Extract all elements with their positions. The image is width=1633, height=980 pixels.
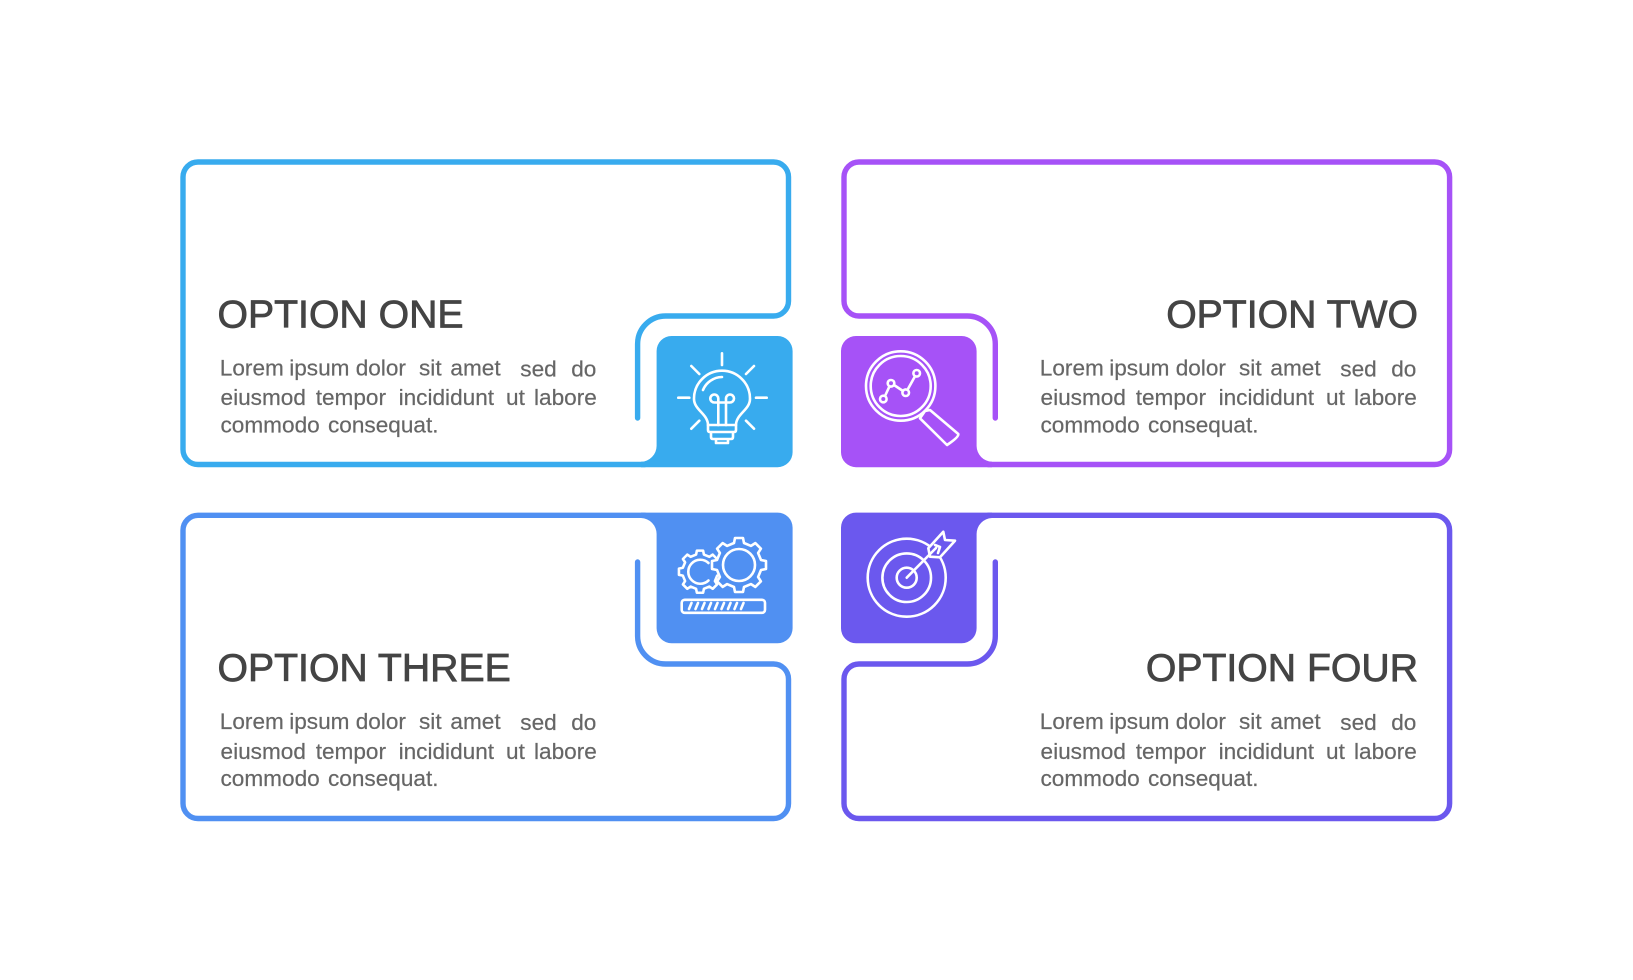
outline: option four <box>844 515 1450 818</box>
text block: option three: ut <box>506 739 526 764</box>
text block: option two: commodo <box>1040 412 1140 438</box>
panel: option four <box>841 513 1450 818</box>
text block: option one: dolor <box>356 356 406 380</box>
icon: light bulb <box>678 353 767 443</box>
text block: option three <box>220 709 597 791</box>
text block: option two: incididunt <box>1219 385 1315 410</box>
outline: option three <box>183 515 788 818</box>
text block: option one: sit <box>419 356 442 380</box>
text block: option two <box>1040 356 1417 438</box>
heading: option three: OPTION THREE <box>218 647 511 690</box>
text block: option four: eiusmod <box>1040 739 1126 764</box>
text block: option three: dolor <box>356 709 406 734</box>
text block: option one: Lorem <box>220 356 284 380</box>
text block: option three: ipsum <box>289 709 349 734</box>
text block: option four: commodo <box>1040 766 1140 791</box>
icon tile: option four <box>841 513 992 643</box>
text block: option one: incididunt <box>399 385 495 410</box>
text block: option four: consequat. <box>1148 766 1259 791</box>
text block: option two: Lorem <box>1040 356 1104 380</box>
text block: option three: labore <box>534 739 597 764</box>
text block: option three: eiusmod <box>220 739 306 764</box>
icon tile: option one <box>641 336 793 467</box>
text block: option two: ut <box>1326 385 1346 410</box>
text block: option two: sit <box>1239 356 1262 380</box>
text block: option two: tempor <box>1136 385 1206 410</box>
icon tile: option two <box>841 336 992 467</box>
text block: option one: amet <box>450 356 501 380</box>
outline: option one <box>183 162 788 464</box>
text block: option one: labore <box>534 385 597 410</box>
text block: option one <box>220 356 597 438</box>
text block: option one: commodo <box>220 412 320 438</box>
text block: option four: sit <box>1239 709 1262 734</box>
text block: option four: amet <box>1270 709 1321 734</box>
heading: option four: OPTION FOUR <box>1146 647 1418 690</box>
text block: option three: sed <box>520 710 557 735</box>
panel: option three <box>183 513 793 818</box>
text block: option four: sed <box>1340 710 1377 735</box>
text block: option four: incididunt <box>1219 739 1315 764</box>
icon: target with arrow <box>868 532 955 617</box>
text block: option three: consequat. <box>328 766 439 791</box>
text block: option one: sed <box>520 356 557 382</box>
text block: option one: ipsum <box>289 356 349 380</box>
text block: option two: dolor <box>1176 356 1226 380</box>
icon: gears with progress bar <box>679 538 766 613</box>
text block: option two: sed <box>1340 356 1377 382</box>
text block: option two: consequat. <box>1148 412 1259 438</box>
text block: option four: Lorem <box>1040 709 1104 734</box>
text block: option two: eiusmod <box>1040 385 1126 410</box>
text block: option one: ut <box>506 385 526 410</box>
text block: option three: do <box>571 710 596 735</box>
heading: option one: OPTION ONE <box>218 293 464 336</box>
text block: option three: amet <box>450 709 501 734</box>
text block: option three: commodo <box>220 766 320 791</box>
text block: option one: consequat. <box>328 412 439 438</box>
outline: option two <box>844 162 1450 464</box>
panel: option two <box>841 162 1450 467</box>
text block: option one: do <box>571 356 596 382</box>
text block: option two: ipsum <box>1109 356 1169 380</box>
text block: option three: Lorem <box>220 709 284 734</box>
text block: option two: do <box>1391 356 1416 382</box>
text block: option three: tempor <box>316 739 386 764</box>
text block: option one: eiusmod <box>220 385 306 410</box>
text block: option four: do <box>1391 710 1416 735</box>
text block: option four: labore <box>1354 739 1417 764</box>
text block: option three: sit <box>419 709 442 734</box>
panel: option one <box>183 162 793 467</box>
text block: option two: amet <box>1270 356 1321 380</box>
text block: option four: ut <box>1326 739 1346 764</box>
icon: magnifier with chart <box>866 351 958 445</box>
text block: option four: dolor <box>1176 709 1226 734</box>
text block: option four <box>1040 709 1417 791</box>
text block: option four: ipsum <box>1109 709 1169 734</box>
heading: option two: OPTION TWO <box>1166 293 1418 336</box>
text block: option three: incididunt <box>399 739 495 764</box>
icon tile: option three <box>641 513 793 643</box>
text block: option four: tempor <box>1136 739 1206 764</box>
text block: option one: tempor <box>316 385 386 410</box>
text block: option two: labore <box>1354 385 1417 410</box>
